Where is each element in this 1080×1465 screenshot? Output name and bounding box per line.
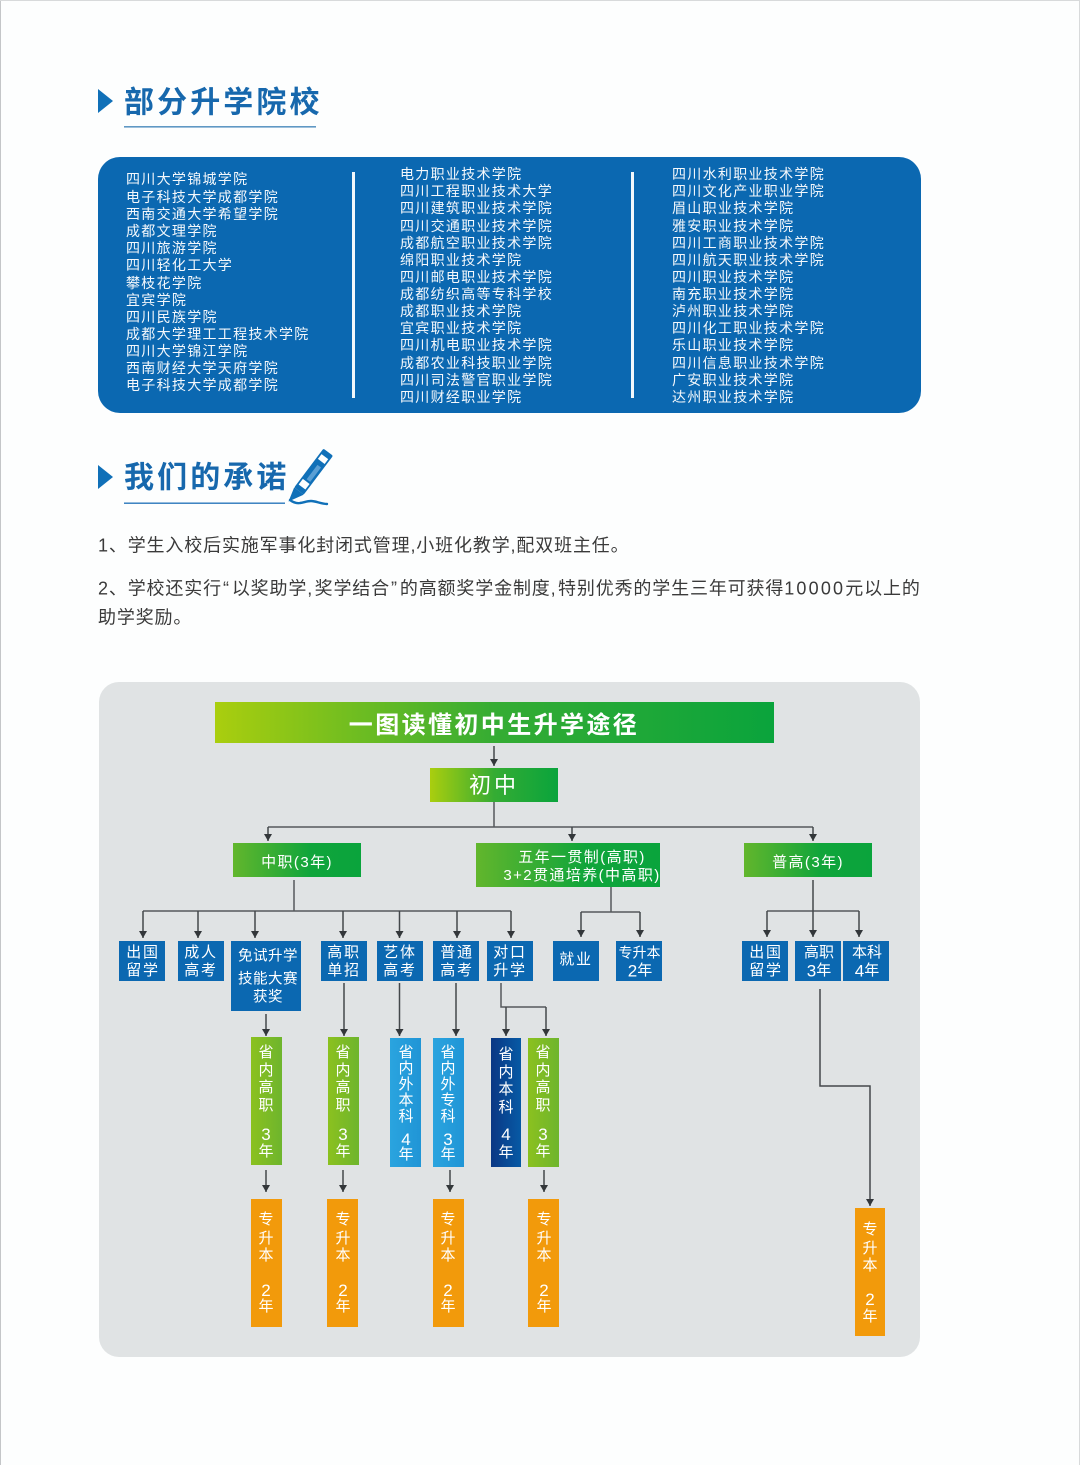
box: 出国留学: 出国 bbox=[126, 944, 160, 961]
bar: 专升本2年 (5): 本 bbox=[862, 1257, 878, 1274]
text block: school column 1: 四川大学锦江学院 bbox=[126, 343, 248, 359]
bar: 省内高职3年 (单招): 年 bbox=[335, 1143, 351, 1160]
bar: 专升本2年 (2): 专 bbox=[335, 1211, 351, 1228]
box: 出国留学 bbox=[119, 941, 165, 981]
text block: promise 2: 2、学校还实行“以奖助学,奖学结合”的高额奖学金制度,特别优秀的学生三年可获得10000元以上的 bbox=[98, 578, 921, 598]
bar: 专升本2年 (3): 专 bbox=[440, 1211, 456, 1228]
box: 初中 bbox=[430, 768, 558, 802]
bar: 省内本科4年: 内 bbox=[498, 1064, 514, 1081]
box: 就业 bbox=[553, 941, 599, 981]
bar: 省内高职3年 (对口): 职 bbox=[535, 1097, 551, 1114]
box: 免试升学: 获奖 bbox=[253, 988, 283, 1005]
bar: 省内高职3年 (免试): 职 bbox=[258, 1097, 274, 1114]
text block: school column 2: 成都职业技术学院 bbox=[400, 303, 522, 319]
box: 中职 bbox=[233, 843, 361, 877]
text block: promise 2 bbox=[98, 578, 921, 627]
bar: 省内高职3年 (单招): 高 bbox=[335, 1079, 351, 1096]
bar: 省内高职3年 (免试): 内 bbox=[258, 1062, 274, 1079]
box: 高职单招: 单招 bbox=[327, 962, 361, 979]
bar: 省内高职3年 (对口) bbox=[528, 1038, 559, 1167]
bar: 专升本2年 (2): 本 bbox=[335, 1247, 351, 1264]
text block: school column 3: 泸州职业技术学院 bbox=[672, 303, 794, 319]
box: 高职3年: 高职 bbox=[804, 944, 834, 961]
bar: 专升本2年 (1): 升 bbox=[258, 1230, 274, 1247]
box: 艺体高考: 高考 bbox=[383, 962, 417, 979]
bar: 省内高职3年 (单招) bbox=[328, 1037, 359, 1165]
bar: 省内外专科3年: 内 bbox=[440, 1060, 456, 1077]
text block: school column 1: 电子科技大学成都学院 bbox=[126, 377, 279, 393]
box: 成人高考: 高考 bbox=[184, 962, 218, 979]
box: 艺体高考: 艺体 bbox=[383, 944, 417, 961]
bar: 省内高职3年 (对口): 高 bbox=[535, 1079, 551, 1096]
box: 高职3年: 3年 bbox=[807, 961, 831, 980]
bar: 专升本2年 (2): 年 bbox=[335, 1298, 351, 1315]
text block: school column 3: 眉山职业技术学院 bbox=[672, 200, 794, 216]
text block: school column 1: 四川民族学院 bbox=[126, 309, 218, 325]
text block: school column 2: 四川机电职业技术学院 bbox=[400, 337, 553, 353]
box: 出国留学: 留学 bbox=[126, 962, 160, 979]
box: 对口升学: 升学 bbox=[493, 962, 527, 979]
bar: 省内外专科3年 bbox=[433, 1038, 464, 1167]
bar: 省内高职3年 (免试): 高 bbox=[258, 1079, 274, 1096]
text block: school column 2: 四川交通职业技术学院 bbox=[400, 218, 553, 234]
box: 专升本2年: 2年 bbox=[628, 961, 652, 980]
text block: school column 1: 西南交通大学希望学院 bbox=[126, 206, 279, 222]
bar: 省内外本科4年 bbox=[390, 1038, 421, 1167]
bar: 省内外专科3年: 专 bbox=[440, 1092, 456, 1109]
bar: 专升本2年 (5): 年 bbox=[862, 1308, 878, 1325]
bar: 省内高职3年 (免试): 年 bbox=[258, 1143, 274, 1160]
bar: 省内高职3年 (免试): 3 bbox=[261, 1125, 271, 1144]
bar: 专升本2年 (1): 年 bbox=[258, 1298, 274, 1315]
bar: 省内外专科3年: 省 bbox=[440, 1044, 456, 1061]
bar: 省内高职3年 (单招): 3 bbox=[338, 1125, 348, 1144]
box: 高职3年 bbox=[795, 941, 841, 981]
text block: school column 1: 电子科技大学成都学院 bbox=[126, 189, 279, 205]
text block: school column 1 bbox=[126, 171, 310, 393]
bar: 专升本2年 (5): 专 bbox=[862, 1221, 878, 1238]
panel: school list bbox=[98, 157, 921, 413]
bar: 专升本2年 (4): 本 bbox=[536, 1247, 552, 1264]
box: 成人高考 bbox=[178, 941, 224, 981]
text block: school column 2: 成都纺织高等专科学校 bbox=[400, 286, 553, 302]
bar: 省内本科4年: 省 bbox=[498, 1046, 514, 1063]
connector: 高职3年 to 专升本 bbox=[820, 989, 870, 1206]
bar: 省内外专科3年: 年 bbox=[440, 1146, 456, 1163]
bar: 省内外本科4年: 内 bbox=[398, 1060, 414, 1077]
bar: 专升本2年 (1): 2 bbox=[261, 1281, 271, 1300]
bar: 省内高职3年 (单招): 内 bbox=[335, 1062, 351, 1079]
arrows: bars to 专升本 bbox=[266, 1170, 544, 1192]
bar: 省内外专科3年: 3 bbox=[443, 1130, 453, 1149]
bar: 专升本2年 (2): 2 bbox=[338, 1281, 348, 1300]
bar: 专升本2年 (2): 升 bbox=[335, 1230, 351, 1247]
bar: 专升本2年 (1): 本 bbox=[258, 1247, 274, 1264]
heading: 我们的承诺 bbox=[98, 461, 290, 504]
panel: pathway flowchart bbox=[99, 682, 920, 1357]
bar: 专升本2年 (1) bbox=[251, 1199, 282, 1327]
box: 普高 bbox=[744, 843, 872, 877]
text block: school column 2: 电力职业技术学院 bbox=[400, 166, 522, 182]
bar: 专升本2年 (1): 专 bbox=[258, 1211, 274, 1228]
connector: 普高 branches bbox=[767, 880, 859, 937]
bar: 专升本2年 (3): 升 bbox=[440, 1230, 456, 1247]
bar: 省内本科4年 bbox=[491, 1038, 521, 1167]
box: 本科4年: 本科 bbox=[852, 944, 882, 961]
bar: 专升本2年 (2) bbox=[327, 1199, 358, 1327]
box: 普高: 普高(3年) bbox=[772, 854, 844, 871]
box: 艺体高考 bbox=[377, 941, 423, 981]
icon: pen bbox=[288, 449, 333, 504]
box: 专升本2年: 专升本 bbox=[618, 944, 660, 960]
text block: school column 2 bbox=[400, 166, 553, 405]
text block: school column 2: 四川财经职业学院 bbox=[400, 389, 522, 405]
text block: school column 3 bbox=[672, 166, 825, 405]
box: 出国留学 (普高) bbox=[742, 941, 788, 981]
text block: school column 2: 宜宾职业技术学院 bbox=[400, 320, 522, 336]
box: 免试升学 bbox=[231, 941, 301, 1011]
text block: school column 2: 四川建筑职业技术学院 bbox=[400, 200, 553, 216]
text block: school column 1: 四川轻化工大学 bbox=[126, 257, 233, 273]
box: 出国留学 (普高): 出国 bbox=[749, 944, 783, 961]
text block: school column 2: 成都航空职业技术学院 bbox=[400, 235, 553, 251]
box: 普通高考: 高考 bbox=[440, 962, 474, 979]
bar: 省内高职3年 (免试): 省 bbox=[258, 1044, 274, 1061]
text block: school column 3: 雅安职业技术学院 bbox=[672, 218, 794, 234]
bar: 省内本科4年: 4 bbox=[501, 1125, 511, 1144]
bar: 省内高职3年 (对口): 3 bbox=[538, 1125, 548, 1144]
bar: 省内本科4年: 本 bbox=[498, 1081, 514, 1098]
bar: 专升本2年 (4): 年 bbox=[536, 1298, 552, 1315]
text block: school column 3: 南充职业技术学院 bbox=[672, 286, 794, 302]
arrow: title to 初中 bbox=[493, 746, 495, 766]
box: 中职: 中职(3年) bbox=[261, 854, 333, 871]
text block: school column 2: 绵阳职业技术学院 bbox=[400, 252, 522, 268]
box: 五年一贯制 bbox=[476, 843, 661, 887]
bar: 专升本2年 (3): 本 bbox=[440, 1247, 456, 1264]
bar: 省内外本科4年: 4 bbox=[401, 1130, 411, 1149]
bar: 专升本2年 (5): 升 bbox=[862, 1240, 878, 1257]
bar: 专升本2年 (5): 2 bbox=[865, 1290, 875, 1309]
text block: school column 1: 四川大学锦城学院 bbox=[126, 171, 248, 187]
bar: 省内高职3年 (单招): 职 bbox=[335, 1097, 351, 1114]
title bar bbox=[215, 702, 774, 743]
bar: 省内高职3年 (对口): 内 bbox=[535, 1062, 551, 1079]
connector: 初中 to three tracks bbox=[268, 802, 813, 841]
box: 对口升学: 对口 bbox=[493, 944, 527, 961]
box: 就业: 就业 bbox=[559, 951, 593, 968]
text block: school column 3: 四川信息职业技术学院 bbox=[672, 355, 825, 371]
text block: school column 3: 广安职业技术学院 bbox=[672, 372, 794, 388]
box: 普通高考 bbox=[433, 941, 479, 981]
bar: 省内外本科4年: 科 bbox=[398, 1108, 414, 1125]
text block: school column 2: 四川司法警官职业学院 bbox=[400, 372, 553, 388]
bar: 省内外专科3年: 科 bbox=[440, 1108, 456, 1125]
box: 五年一贯制: 五年一贯制(高职) bbox=[518, 849, 646, 866]
text block: school column 1: 成都大学理工工程技术学院 bbox=[126, 326, 310, 342]
bar: 省内本科4年: 科 bbox=[498, 1099, 514, 1116]
box: 免试升学: 免试升学 bbox=[238, 947, 298, 964]
text block: school column 2: 成都农业科技职业学院 bbox=[400, 355, 553, 371]
box: 本科4年: 4年 bbox=[855, 961, 879, 980]
text block: school column 3: 四川职业技术学院 bbox=[672, 269, 794, 285]
box: 免试升学: 技能大赛 bbox=[238, 970, 298, 987]
bar: 省内本科4年: 年 bbox=[498, 1144, 514, 1161]
bar: 省内外本科4年: 外 bbox=[398, 1076, 414, 1093]
box: 五年一贯制: 3+2贯通培养(中高职) bbox=[503, 867, 661, 884]
bar: 专升本2年 (3): 2 bbox=[443, 1281, 453, 1300]
bar: 省内高职3年 (免试) bbox=[251, 1037, 282, 1165]
text block: school column 3: 四川化工职业技术学院 bbox=[672, 320, 825, 336]
bar: 省内外本科4年: 年 bbox=[398, 1146, 414, 1163]
bar: 省内外本科4年: 省 bbox=[398, 1044, 414, 1061]
bar: 专升本2年 (3) bbox=[433, 1199, 464, 1327]
box: 高职单招: 高职 bbox=[327, 944, 361, 961]
text block: school column 1: 攀枝花学院 bbox=[126, 275, 202, 291]
bar: 专升本2年 (3): 年 bbox=[440, 1298, 456, 1315]
connector: 中职 branches bbox=[143, 880, 511, 938]
bar: 专升本2年 (4): 专 bbox=[536, 1211, 552, 1228]
bar: 省内高职3年 (对口): 省 bbox=[535, 1044, 551, 1061]
text block: school column 3: 四川工商职业技术学院 bbox=[672, 235, 825, 251]
bar: 省内高职3年 (单招): 省 bbox=[335, 1044, 351, 1061]
bar: 专升本2年 (5) bbox=[855, 1208, 885, 1336]
text block: school column 2: 四川工程职业技术大学 bbox=[400, 183, 553, 199]
text block: school column 3: 乐山职业技术学院 bbox=[672, 337, 794, 353]
text block: school column 3: 四川文化产业职业学院 bbox=[672, 183, 825, 199]
connector: 五年一贯制 branches bbox=[581, 887, 640, 937]
text block: promise 2: 助学奖励。 bbox=[98, 607, 192, 627]
text block: school column 1: 西南财经大学天府学院 bbox=[126, 360, 279, 376]
box: 高职单招 bbox=[321, 941, 367, 981]
box: 本科4年 bbox=[843, 941, 889, 981]
box: 出国留学 (普高): 留学 bbox=[749, 962, 783, 979]
text block: school column 3: 四川航天职业技术学院 bbox=[672, 252, 825, 268]
heading: 我们的承诺: 我们的承诺 bbox=[124, 461, 290, 494]
bar: 专升本2年 (4): 升 bbox=[536, 1230, 552, 1247]
title bar: 一图读懂初中生升学途径 bbox=[349, 711, 639, 739]
bar: 专升本2年 (4) bbox=[528, 1199, 559, 1327]
text block: school column 2: 四川邮电职业技术学院 bbox=[400, 269, 553, 285]
box: 初中: 初中 bbox=[469, 773, 519, 798]
box: 对口升学 bbox=[487, 941, 533, 981]
box: 专升本2年 bbox=[616, 941, 662, 981]
text block: school column 1: 宜宾学院 bbox=[126, 292, 187, 308]
text block: school column 1: 成都文理学院 bbox=[126, 223, 218, 239]
text block: school column 3: 达州职业技术学院 bbox=[672, 389, 794, 405]
connector: second-level arrows bbox=[266, 983, 546, 1036]
box: 成人高考: 成人 bbox=[184, 944, 218, 961]
text block: school column 1: 四川旅游学院 bbox=[126, 240, 218, 256]
heading: 部分升学院校: 部分升学院校 bbox=[124, 86, 323, 119]
bar: 省内外专科3年: 外 bbox=[440, 1076, 456, 1093]
bar: 专升本2年 (4): 2 bbox=[539, 1281, 549, 1300]
text block: promise 1: 1、学生入校后实施军事化封闭式管理,小班化教学,配双班主任。 bbox=[98, 535, 630, 555]
box: 普通高考: 普通 bbox=[440, 944, 474, 961]
bar: 省内外本科4年: 本 bbox=[398, 1092, 414, 1109]
text block: school column 3: 四川水利职业技术学院 bbox=[672, 166, 825, 182]
bar: 省内高职3年 (对口): 年 bbox=[535, 1143, 551, 1160]
